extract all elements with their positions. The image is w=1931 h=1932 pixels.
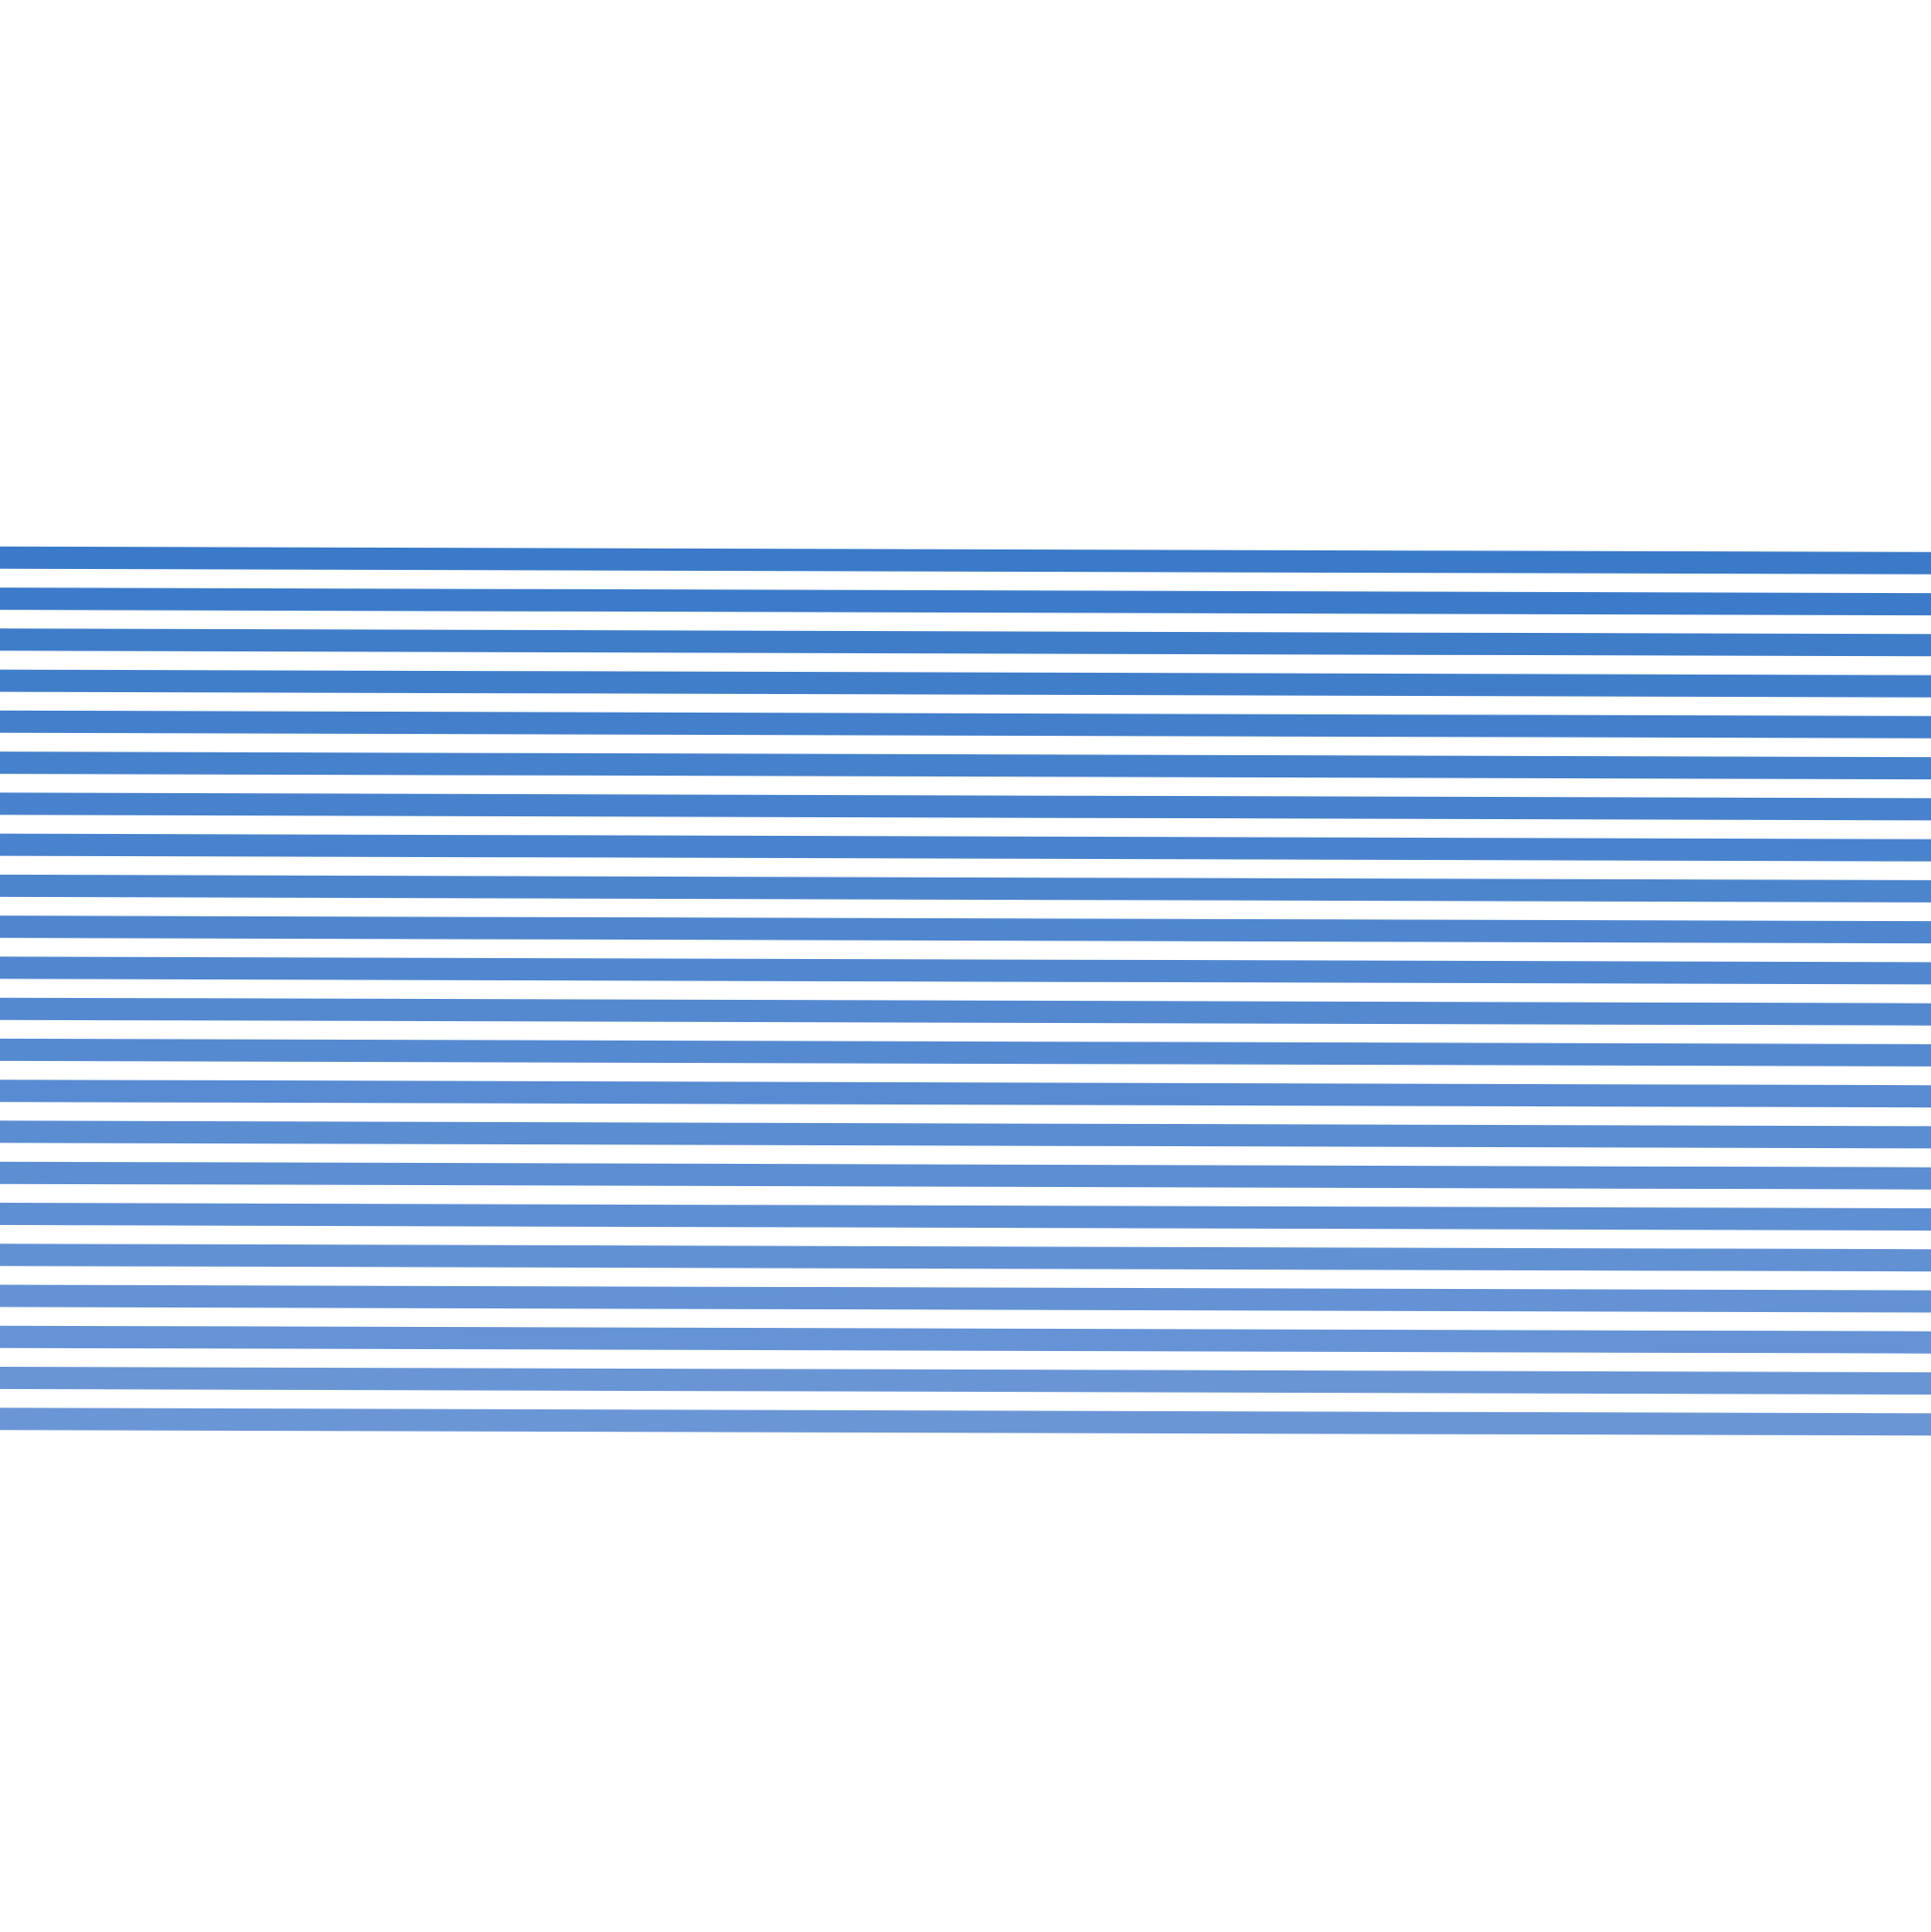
stripe 10: [0, 915, 1931, 943]
stripe 3: [0, 628, 1931, 656]
stripe 6: [0, 751, 1931, 779]
stripe 8: [0, 834, 1931, 862]
stripe 16: [0, 1162, 1931, 1190]
stripe 17: [0, 1203, 1931, 1231]
stripe 22: [0, 1408, 1931, 1435]
stripe 7: [0, 792, 1931, 820]
stripe 20: [0, 1326, 1931, 1354]
stripe 15: [0, 1120, 1931, 1148]
stripe 1: [0, 547, 1931, 575]
stripe group: 22 slightly sloped horizontal bands: [0, 547, 1931, 1435]
stripe 14: [0, 1080, 1931, 1107]
stripe 4: [0, 670, 1931, 698]
stripe 9: [0, 875, 1931, 903]
stripe 21: [0, 1367, 1931, 1395]
stripe 11: [0, 956, 1931, 984]
stripe 18: [0, 1244, 1931, 1271]
stripe 2: [0, 587, 1931, 615]
stripe 12: [0, 998, 1931, 1026]
stripe 5: [0, 711, 1931, 739]
stripe 19: [0, 1284, 1931, 1312]
stripe 13: [0, 1039, 1931, 1067]
